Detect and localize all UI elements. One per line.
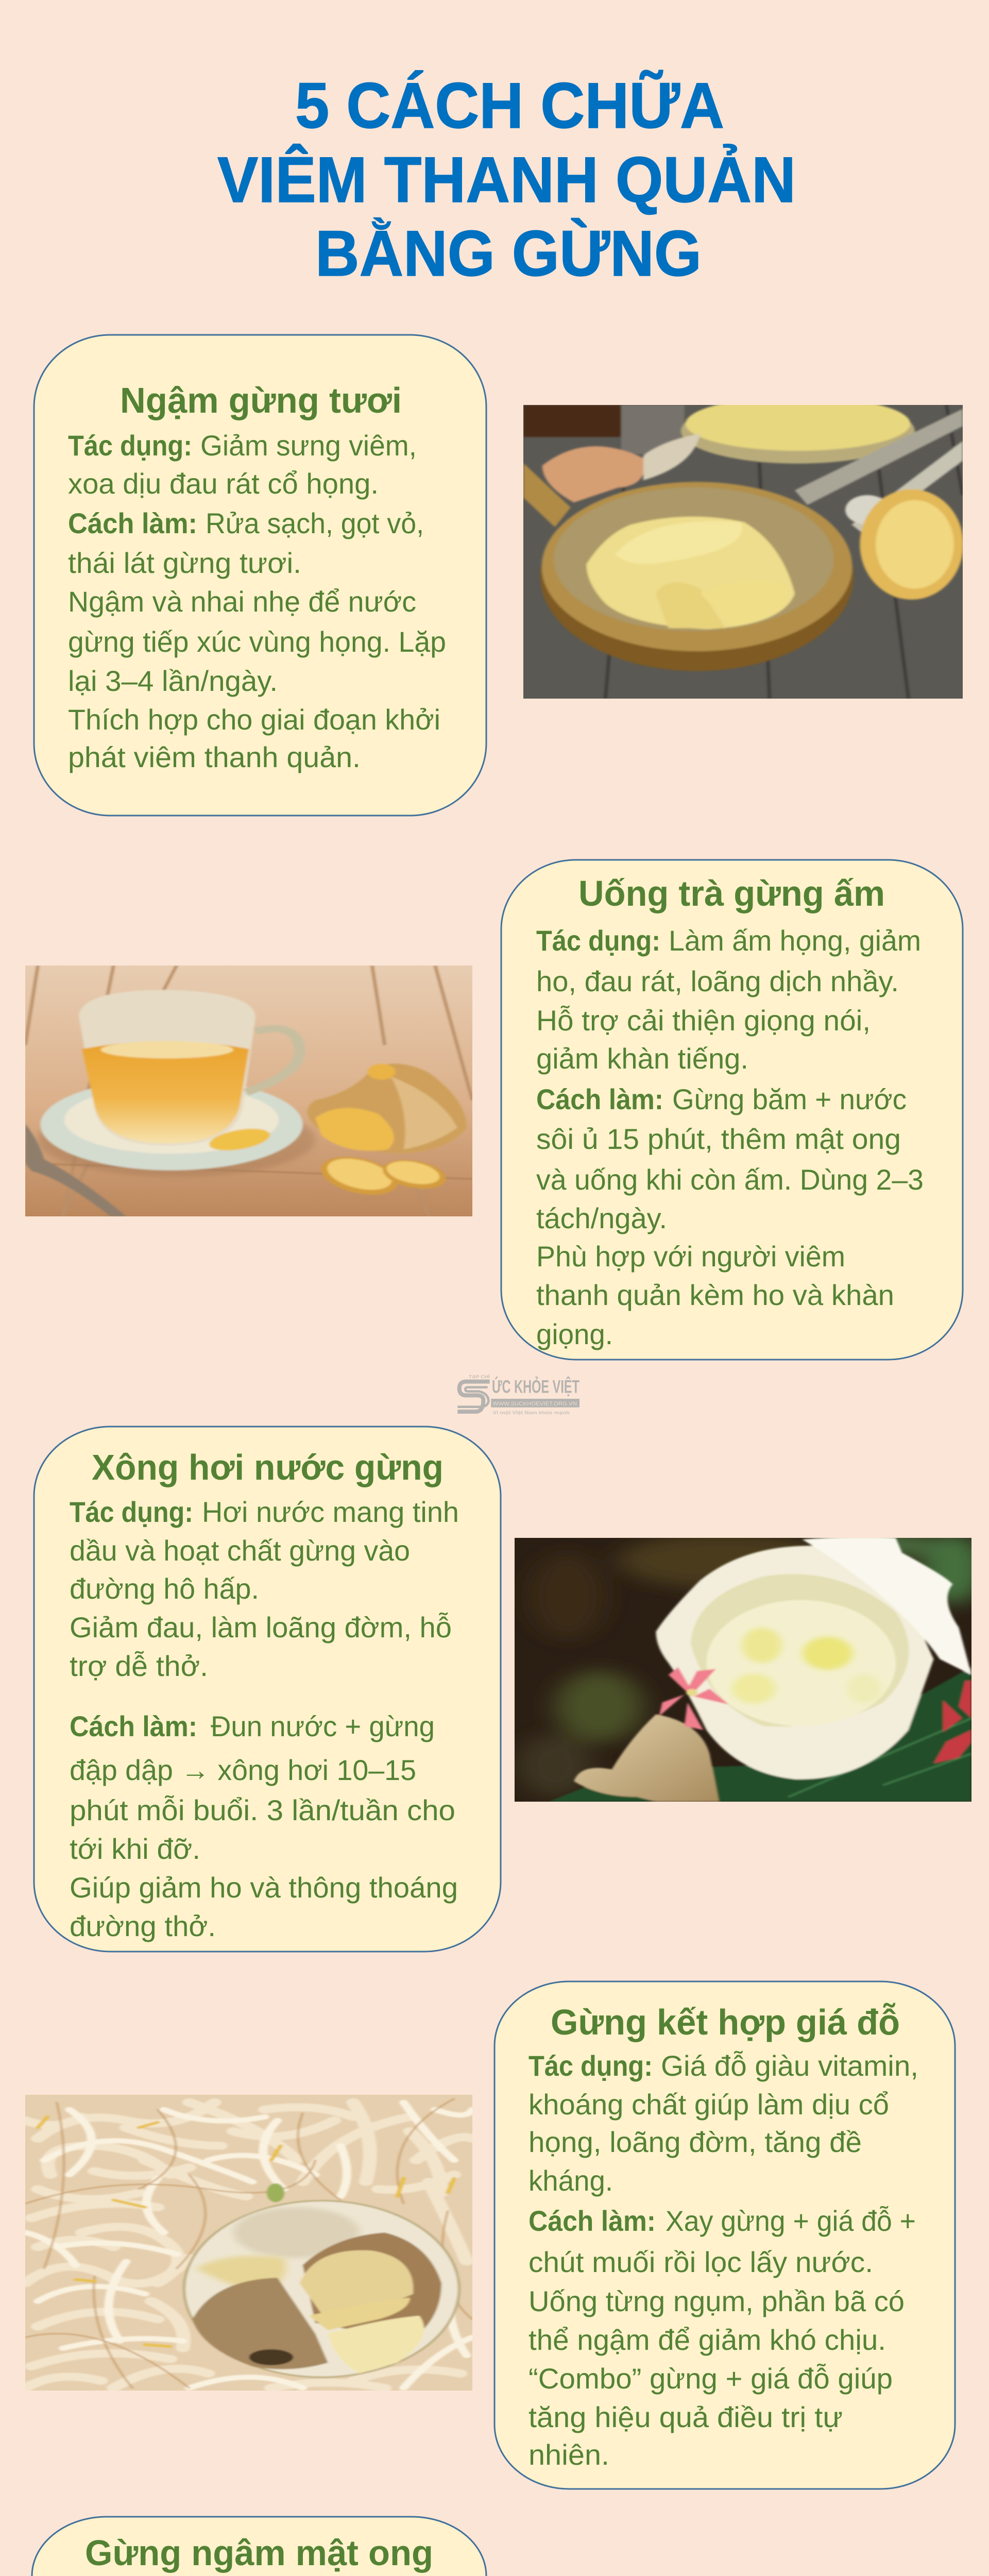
text block: method 1: Thích hợp cho giai đoạn khởi: [68, 703, 440, 736]
text block: method 2: giọng.: [536, 1318, 613, 1350]
watermark logo: WWW.SUCKHOEVIET.ORG.VN: [493, 1401, 577, 1407]
text block: method 4: [528, 2049, 918, 2471]
text block: method 3: Tác dụng:: [70, 1496, 193, 1528]
photo: ginger tea in glass cup: [25, 965, 472, 1216]
text block: method 2: ho, đau rát, loãng dịch nhầy.: [536, 965, 899, 997]
watermark logo: [457, 1374, 579, 1415]
text block: method 4: chút muối rồi lọc lấy nước.: [528, 2246, 873, 2278]
heading: Xông hơi nước gừng: [92, 1447, 444, 1487]
photo: white ceramic pot with ginger: [515, 1538, 971, 1802]
text block: method 4: Uống từng ngụm, phần bã có: [528, 2285, 905, 2317]
heading: Uống trà gừng ấm: [578, 873, 885, 913]
panel: Gừng kết hợp giá đỗ: [494, 1981, 955, 2489]
watermark logo: TẠP CHÍ: [469, 1374, 490, 1379]
text block: method 4: Giá đỗ giàu vitamin,: [661, 2049, 918, 2082]
text block: method 1: lại 3–4 lần/ngày.: [68, 665, 278, 697]
text block: method 3: trợ dễ thở.: [70, 1650, 208, 1682]
text block: method 1: xoa dịu đau rát cổ họng.: [68, 467, 379, 500]
text block: method 2: tách/ngày.: [536, 1202, 667, 1234]
text block: method 3: Giúp giảm ho và thông thoáng: [70, 1871, 458, 1904]
text block: method 1: Giảm sưng viêm,: [200, 429, 417, 462]
text block: method 2: Gừng băm + nước: [672, 1083, 907, 1115]
text block: method 2: Phù hợp với người viêm: [536, 1240, 845, 1273]
text block: method 2: và uống khi còn ấm. Dùng 2–3: [536, 1163, 924, 1196]
text block: method 3: tới khi đỡ.: [70, 1833, 200, 1865]
text block: method 4: khoáng chất giúp làm dịu cổ: [528, 2088, 889, 2121]
text block: method 4: Xay gừng + giá đỗ +: [666, 2205, 916, 2237]
text block: method 3: Hơi nước mang tinh: [202, 1496, 459, 1528]
text block: method 2: thanh quản kèm ho và khàn: [536, 1279, 894, 1311]
text block: method 4: Cách làm:: [528, 2205, 656, 2237]
text block: method 1: Ngậm và nhai nhẹ để nước: [68, 585, 416, 618]
title: [217, 70, 796, 290]
watermark logo: Vì một Việt Nam khỏe mạnh: [493, 1410, 570, 1415]
card background: [501, 860, 963, 1360]
text block: method 3: đập dập → xông hơi 10–15: [70, 1754, 416, 1786]
text block: method 1: phát viêm thanh quản.: [68, 741, 361, 773]
text block: method 2: Hỗ trợ cải thiện giọng nói,: [536, 1004, 871, 1037]
text block: method 1: thái lát gừng tươi.: [68, 547, 301, 579]
text block: method 4: thể ngậm để giảm khó chịu.: [528, 2324, 886, 2356]
text block: method 4: Tác dụng:: [528, 2049, 653, 2082]
text block: method 2: [536, 924, 924, 1350]
text block: method 1: [68, 429, 446, 773]
card background: [34, 1427, 501, 1952]
panel: Gừng ngâm mật ong: [32, 2517, 486, 2576]
title: 5 CÁCH CHỮA: [295, 70, 724, 142]
panel: Uống trà gừng ấm: [501, 860, 963, 1360]
text block: method 3: phút mỗi buổi. 3 lần/tuần cho: [70, 1794, 455, 1826]
text block: method 3: Cách làm:: [70, 1710, 197, 1742]
panel: Xông hơi nước gừng: [34, 1427, 501, 1952]
text block: method 4: tăng hiệu quả điều trị tự: [528, 2401, 843, 2433]
text block: method 3: dầu và hoạt chất gừng vào: [70, 1534, 410, 1567]
heading: Ngậm gừng tươi: [120, 380, 402, 420]
photo: bean sprouts with ginger inset: [25, 2095, 472, 2391]
card background: [32, 2517, 486, 2576]
text block: method 1: Tác dụng:: [68, 429, 192, 462]
text block: method 1: Rửa sạch, gọt vỏ,: [206, 507, 424, 539]
text block: method 2: Tác dụng:: [536, 924, 660, 957]
panel: Ngậm gừng tươi: [34, 335, 486, 816]
text block: method 4: nhiên.: [528, 2438, 609, 2471]
text block: method 1: gừng tiếp xúc vùng họng. Lặp: [68, 625, 446, 658]
title: BẰNG GỪNG: [315, 218, 702, 290]
card background: [34, 335, 486, 816]
text block: method 2: Cách làm:: [536, 1083, 663, 1115]
text block: method 4: “Combo” gừng + giá đỗ giúp: [528, 2362, 893, 2395]
text block: method 3: [70, 1496, 459, 1942]
text block: method 1: Cách làm:: [68, 507, 197, 539]
text block: method 2: Làm ấm họng, giảm: [669, 924, 921, 957]
photo: sliced ginger in ceramic bowl: [523, 405, 963, 699]
heading: Gừng kết hợp giá đỗ: [551, 2002, 900, 2042]
text block: method 2: sôi ủ 15 phút, thêm mật ong: [536, 1123, 901, 1155]
text block: method 3: Giảm đau, làm loãng đờm, hỗ: [70, 1611, 452, 1643]
text block: method 4: kháng.: [528, 2164, 613, 2197]
text block: method 2: giảm khàn tiếng.: [536, 1042, 748, 1075]
title: VIÊM THANH QUẢN: [217, 144, 796, 216]
text block: method 3: đường hô hấp.: [70, 1572, 259, 1605]
text block: method 3: Đun nước + gừng: [211, 1710, 435, 1742]
card background: [494, 1981, 955, 2489]
text block: method 4: họng, loãng đờm, tăng đề: [528, 2126, 862, 2158]
text block: method 3: đường thở.: [70, 1910, 216, 1942]
heading: Gừng ngâm mật ong: [85, 2533, 433, 2573]
